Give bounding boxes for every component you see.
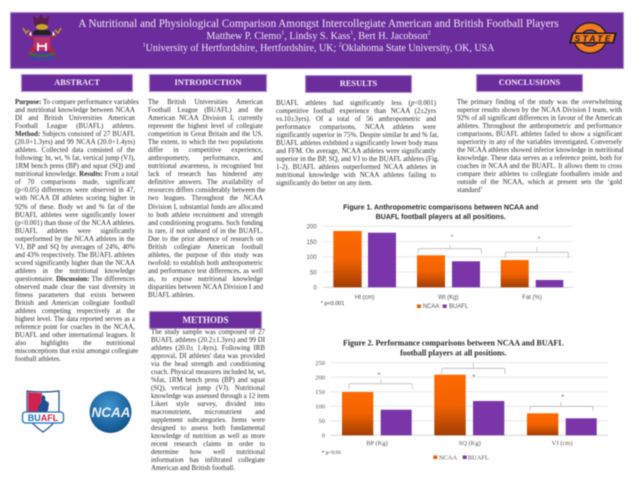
text block: results: performance comparisons, NCAA athletes were — [276, 124, 436, 131]
significance asterisks: * — [451, 235, 454, 241]
text block: abstract: DI and British Universities American — [15, 115, 135, 122]
text block: methods: information has infiltrated collegiate — [151, 457, 265, 464]
text block: introduction: as, to expose nutritional knowledge — [148, 276, 263, 283]
text block: introduction: differ in competitive experience, — [148, 147, 263, 154]
figure 2 title: football players at all positions. — [400, 348, 507, 357]
text block: results: BUAFL athletes had significantly less (p<0.001) — [276, 100, 436, 107]
text block: introduction: disparities between NCAA Division I and — [148, 284, 263, 291]
text block: abstract: Purpose: To compare performance variables — [15, 99, 139, 106]
text block: methods: knowledge was assessed through a 12 item — [151, 393, 269, 400]
text block: conclusions: The primary finding of the study was the overwhelming — [457, 99, 622, 106]
text block: methods: determine how well nutritional — [151, 449, 265, 456]
text block: abstract: 1RM bench press (BP) and squat (SQ) and — [15, 163, 135, 170]
text block: results: and FFM. On average, NCAA athletes were significantly — [276, 148, 436, 155]
heading: introduction: INTRODUCTION — [174, 78, 242, 87]
text block: conclusions: comparisons, BUAFL athletes failed to show a significant — [457, 131, 622, 138]
text block: methods: American and British football. — [151, 465, 235, 472]
text block: introduction: and conditioning programs. Such funding — [148, 220, 263, 227]
text block: introduction: Due to the prior absence of research on — [148, 236, 263, 243]
text block: methods: recent research claims in order to — [151, 441, 265, 448]
text block: methods — [150, 328, 270, 472]
text block: introduction: to both athlete recruitment and strength — [148, 212, 263, 219]
text block: abstract: outperformed by the NCAA athletes in the — [15, 236, 135, 243]
text block: results: vs.10±3yrs). Of a total of 56 anthropometric and — [276, 116, 436, 123]
text block: methods: approval, DI athletes' data was provided — [151, 353, 265, 360]
text block: introduction: twofold: to establish both anthropometric — [148, 260, 263, 267]
text block: methods: Likert style survey, divided into — [151, 401, 265, 408]
legend — [417, 304, 469, 310]
text block: conclusions: superiority in any of the variables investigated. Conversely — [457, 139, 622, 146]
text block: abstract: and nutritional knowledge between NCAA — [15, 107, 135, 114]
text block: introduction: two leagues. Throughout the NCAA — [148, 195, 263, 202]
text block: abstract: athletes in the nutritional knowledge — [15, 268, 135, 275]
significance asterisks: * — [538, 237, 541, 243]
y axis labels: 200 — [307, 224, 317, 230]
category labels: Ht (cm) — [355, 295, 375, 301]
text block: conclusions — [456, 98, 624, 194]
text block: conclusions: the NCAA athletes showed inferior knowledge in nutritional — [457, 147, 624, 154]
category labels: BP (Kg) — [366, 440, 388, 447]
y axis labels: 100 — [307, 255, 317, 261]
figure 1 title: Figure 1. Anthropometric comparisons between NCAA and — [343, 204, 538, 212]
text block: abstract: (20.0+1.3yrs) and 99 NCAA (20.0+1.4yrs) — [15, 139, 135, 146]
significance asterisks — [451, 235, 541, 243]
y axis labels — [315, 360, 325, 440]
text block: abstract: with NCAA DI athletes scoring higher in — [15, 195, 135, 202]
text block: abstract: (p<0.001) than those of the NCAA athletes. — [15, 220, 135, 227]
category labels — [366, 440, 573, 447]
legend: NCAA — [423, 304, 439, 310]
text block: abstract: BUAFL and other international leagues. It — [15, 332, 135, 339]
text block: methods: macronutrient, micronutrient and — [151, 409, 265, 416]
significance asterisks: * — [472, 374, 475, 380]
category labels: Wt (Kg) — [438, 295, 458, 301]
text block: abstract: VJ, BP and SQ by averages of 24%, 40% — [15, 244, 135, 251]
text block: abstract: 92% of these. Body wt and % fat of the — [15, 204, 135, 210]
text block: methods: The study sample was composed of 27 — [151, 329, 265, 336]
text block: introduction: represent the highest level of collegiate — [148, 123, 263, 130]
text block: introduction: Football League (BUAFL) and the — [148, 107, 263, 114]
text block: conclusions: outside of the NCAA, which at present sets the ‘gold — [457, 179, 622, 186]
text block: abstract: Method: Subjects consisted of 27 BUAFL — [15, 131, 135, 138]
chart: figure 2 performance comparisons — [315, 338, 608, 462]
text block: conclusions: standard’ — [457, 187, 483, 194]
text block: results: superior in the BP, SQ, and VJ to the BUAFL athletes (Fig. — [276, 156, 439, 163]
significance asterisks — [377, 372, 564, 400]
category labels: SQ (Kg) — [459, 440, 481, 447]
heading: conclusions: CONCLUSIONS — [499, 78, 560, 87]
text block: introduction: The British Universities American — [148, 99, 263, 106]
text block: abstract: of 70 comparisons made, significant — [15, 179, 135, 186]
text block: conclusions: 92% of all significant differences in favour of the American — [457, 115, 622, 122]
text block: introduction — [148, 98, 266, 299]
text block: results: significantly superior in 75%. Despite similar ht and % fat, — [276, 132, 438, 139]
y axis labels: 50 — [318, 418, 325, 425]
heading: abstract — [21, 74, 133, 92]
text block: introduction: is rare, if not unheard of in the BUAFL. — [148, 228, 263, 235]
heading: conclusions — [476, 74, 583, 92]
text block: conclusions: athletes. Throughout the anthropometric and performance — [457, 123, 622, 130]
text block: abstract: (p<0.05) differences were observed in 47, — [15, 187, 135, 194]
legend: BUAFL — [449, 304, 469, 310]
text block: introduction: The extent, to which the two populations — [148, 139, 263, 146]
text block: methods: knowledge of nutrition as well as more — [151, 433, 265, 440]
figure 1 title — [343, 204, 538, 221]
heading: methods — [149, 311, 262, 328]
chart: figure 1 anthropometric comparisons — [306, 203, 573, 310]
text block: abstract: BUAFL athletes were significantly lower — [15, 212, 135, 219]
text block: results — [276, 99, 440, 188]
significance asterisks: * — [561, 394, 564, 400]
icon: Oklahoma State logo — [568, 22, 618, 54]
text block: abstract: observed made clear the vast diversity in — [15, 284, 135, 291]
text block: results: significantly do better on any item. — [276, 180, 372, 187]
p note: * p<0.01 — [322, 450, 342, 456]
heading: methods: METHODS — [182, 315, 228, 325]
text block: conclusions: knowledge. These data serves as a reference point, both for — [457, 155, 622, 162]
text block: abstract: and 43% respectively. The BUAFL athletes — [15, 252, 135, 259]
icon: Oklahoma State logo: STATE — [574, 33, 611, 43]
text block: introduction: lack of research has hindered any — [148, 171, 263, 178]
affiliations: 1University of Hertfordshire, Hertfordshire, UK; 2Oklahoma State University, OK, USA — [143, 42, 494, 54]
y axis labels: 0 — [322, 433, 325, 440]
text block: abstract: Football League (BUAFL) athletes. — [15, 123, 135, 130]
bars — [342, 375, 597, 435]
legend — [433, 454, 489, 462]
text block: abstract: scored significantly higher than the NCAA — [15, 260, 135, 267]
text block: abstract: also highlights the nutritional — [15, 340, 135, 347]
icon: NCAA logo — [88, 390, 132, 434]
y axis labels: 200 — [315, 374, 325, 382]
heading: introduction — [149, 74, 267, 92]
text block: results: BUAFL athletes exhibited a significantly lower body mass — [276, 140, 438, 147]
text block: introduction: Division I, substantial funds are allocated — [148, 204, 263, 210]
text block: methods: designed to assess both fundamental — [151, 425, 265, 432]
text block: results: competitive football experience than NCAA (2±2yrs — [276, 108, 436, 115]
text block: abstract: misconceptions that exist amongst collegiate — [15, 348, 138, 355]
text block: abstract: questionnaire. Discussion: The differences — [15, 276, 135, 283]
figure 2 title — [343, 339, 564, 357]
y axis labels: 100 — [315, 404, 325, 411]
text block: abstract: following: ht, wt, % fat, vertical jump (VJ), — [15, 155, 135, 162]
text block: conclusions: compare their athletes to collegiate footballers inside and — [457, 171, 622, 178]
icon: BUAFL logo: BUAFL — [28, 413, 59, 423]
text block: abstract: reference point for coaches in the NCAA, — [15, 324, 135, 331]
text block: abstract: athletes competing respectively at the — [15, 308, 135, 315]
text block: methods: via the head strength and conditioning — [151, 361, 265, 368]
text block: introduction: British collegiate American football — [148, 244, 263, 251]
text block: introduction: competition in Great Britain and the US. — [148, 131, 263, 138]
bars — [333, 231, 563, 287]
text block: abstract: athletes. Collected data consisted of the — [15, 147, 135, 154]
text block: methods: (SQ), vertical jump (VJ). Nutritional — [151, 385, 265, 392]
authors: Matthew P. Clemo1, Lindsy S. Kass1, Bert H. Jacobson2 — [206, 30, 431, 42]
y axis labels: 150 — [315, 389, 325, 396]
significance asterisks: * — [377, 372, 381, 378]
text block: abstract: highest level. The data reported serves as a — [15, 316, 135, 323]
text block: introduction: BUAFL athletes. — [148, 292, 195, 299]
text block: abstract: football athletes. — [15, 356, 61, 363]
y axis labels: 250 — [315, 360, 325, 367]
icon: BUAFL logo — [21, 390, 65, 434]
text block: methods: coach. Physical measures included ht, wt, — [151, 369, 266, 376]
heading: abstract: ABSTRACT — [54, 78, 100, 87]
y axis labels: 50 — [310, 270, 317, 276]
text block: introduction: anthropometry, performance, and — [148, 155, 263, 162]
text block: conclusions: superior results shown by the NCAA Division I team, with — [457, 107, 622, 114]
text block: introduction: and performance test differences, as well — [148, 268, 263, 275]
text block: methods: %fat, 1RM bench press (BP) and squat — [151, 377, 265, 384]
text block: methods: athletes (20.0± 1.4yrs). Following IRB — [151, 345, 265, 352]
text block: introduction: nutritional awareness, is recognised but — [148, 163, 263, 170]
title: A Nutritional and Physiological Comparison Amongst Intercollegiate American and British Football Players — [78, 18, 559, 30]
heading: results: RESULTS — [340, 79, 377, 88]
y axis labels: 150 — [307, 240, 317, 246]
text block: abstract: fitness parameters that exists between — [15, 292, 135, 299]
category labels: Fat (%) — [522, 295, 542, 301]
category labels — [355, 295, 542, 301]
text block: introduction: resources differs considerably between the — [148, 187, 265, 194]
heading: results — [305, 75, 412, 93]
figure 1 title: BUAFL football players at all positions. — [376, 214, 506, 221]
text block: introduction: athletes, the purpose of this study was — [148, 252, 263, 259]
text block: abstract: nutritional knowledge. Results: From a total — [15, 171, 138, 178]
legend: NCAA — [439, 454, 457, 462]
text block: conclusions: coaches in NCAA and the BUAFL. It allows them to cross — [457, 163, 622, 170]
y axis labels: 0 — [313, 286, 317, 292]
text block: results: nutritional knowledge with NCAA athletes failing to — [276, 172, 436, 179]
significance brackets — [349, 363, 593, 411]
icon: university crest — [22, 14, 62, 61]
p note: * p<0.001 — [321, 301, 344, 307]
header banner — [10, 12, 624, 69]
text block: abstract: British and American collegiate football — [15, 300, 135, 307]
text block: methods: supplement subcategories. Items were — [151, 417, 265, 424]
text block: introduction: American NCAA Division I, currently — [148, 115, 263, 122]
figure 2 title: Figure 2. Performance comparisons between NCAA and BUAFL — [343, 339, 564, 348]
text block: results: 1-2). BUAFL athletes outperformed NCAA athletes in — [276, 164, 436, 171]
icon: NCAA logo: NCAA — [92, 405, 130, 420]
text block: methods: BUAFL athletes (20.2±1.3yrs) and 99 DI — [151, 337, 265, 344]
text block: abstract: BUAFL athletes were significantly — [15, 228, 135, 235]
category labels: VJ (cm) — [551, 440, 573, 447]
significance brackets — [418, 245, 568, 258]
y axis labels — [307, 224, 317, 292]
legend: BUAFL — [468, 454, 489, 462]
text block: introduction: definitive answers. The availability of — [148, 179, 263, 186]
text block: abstract — [14, 98, 140, 363]
